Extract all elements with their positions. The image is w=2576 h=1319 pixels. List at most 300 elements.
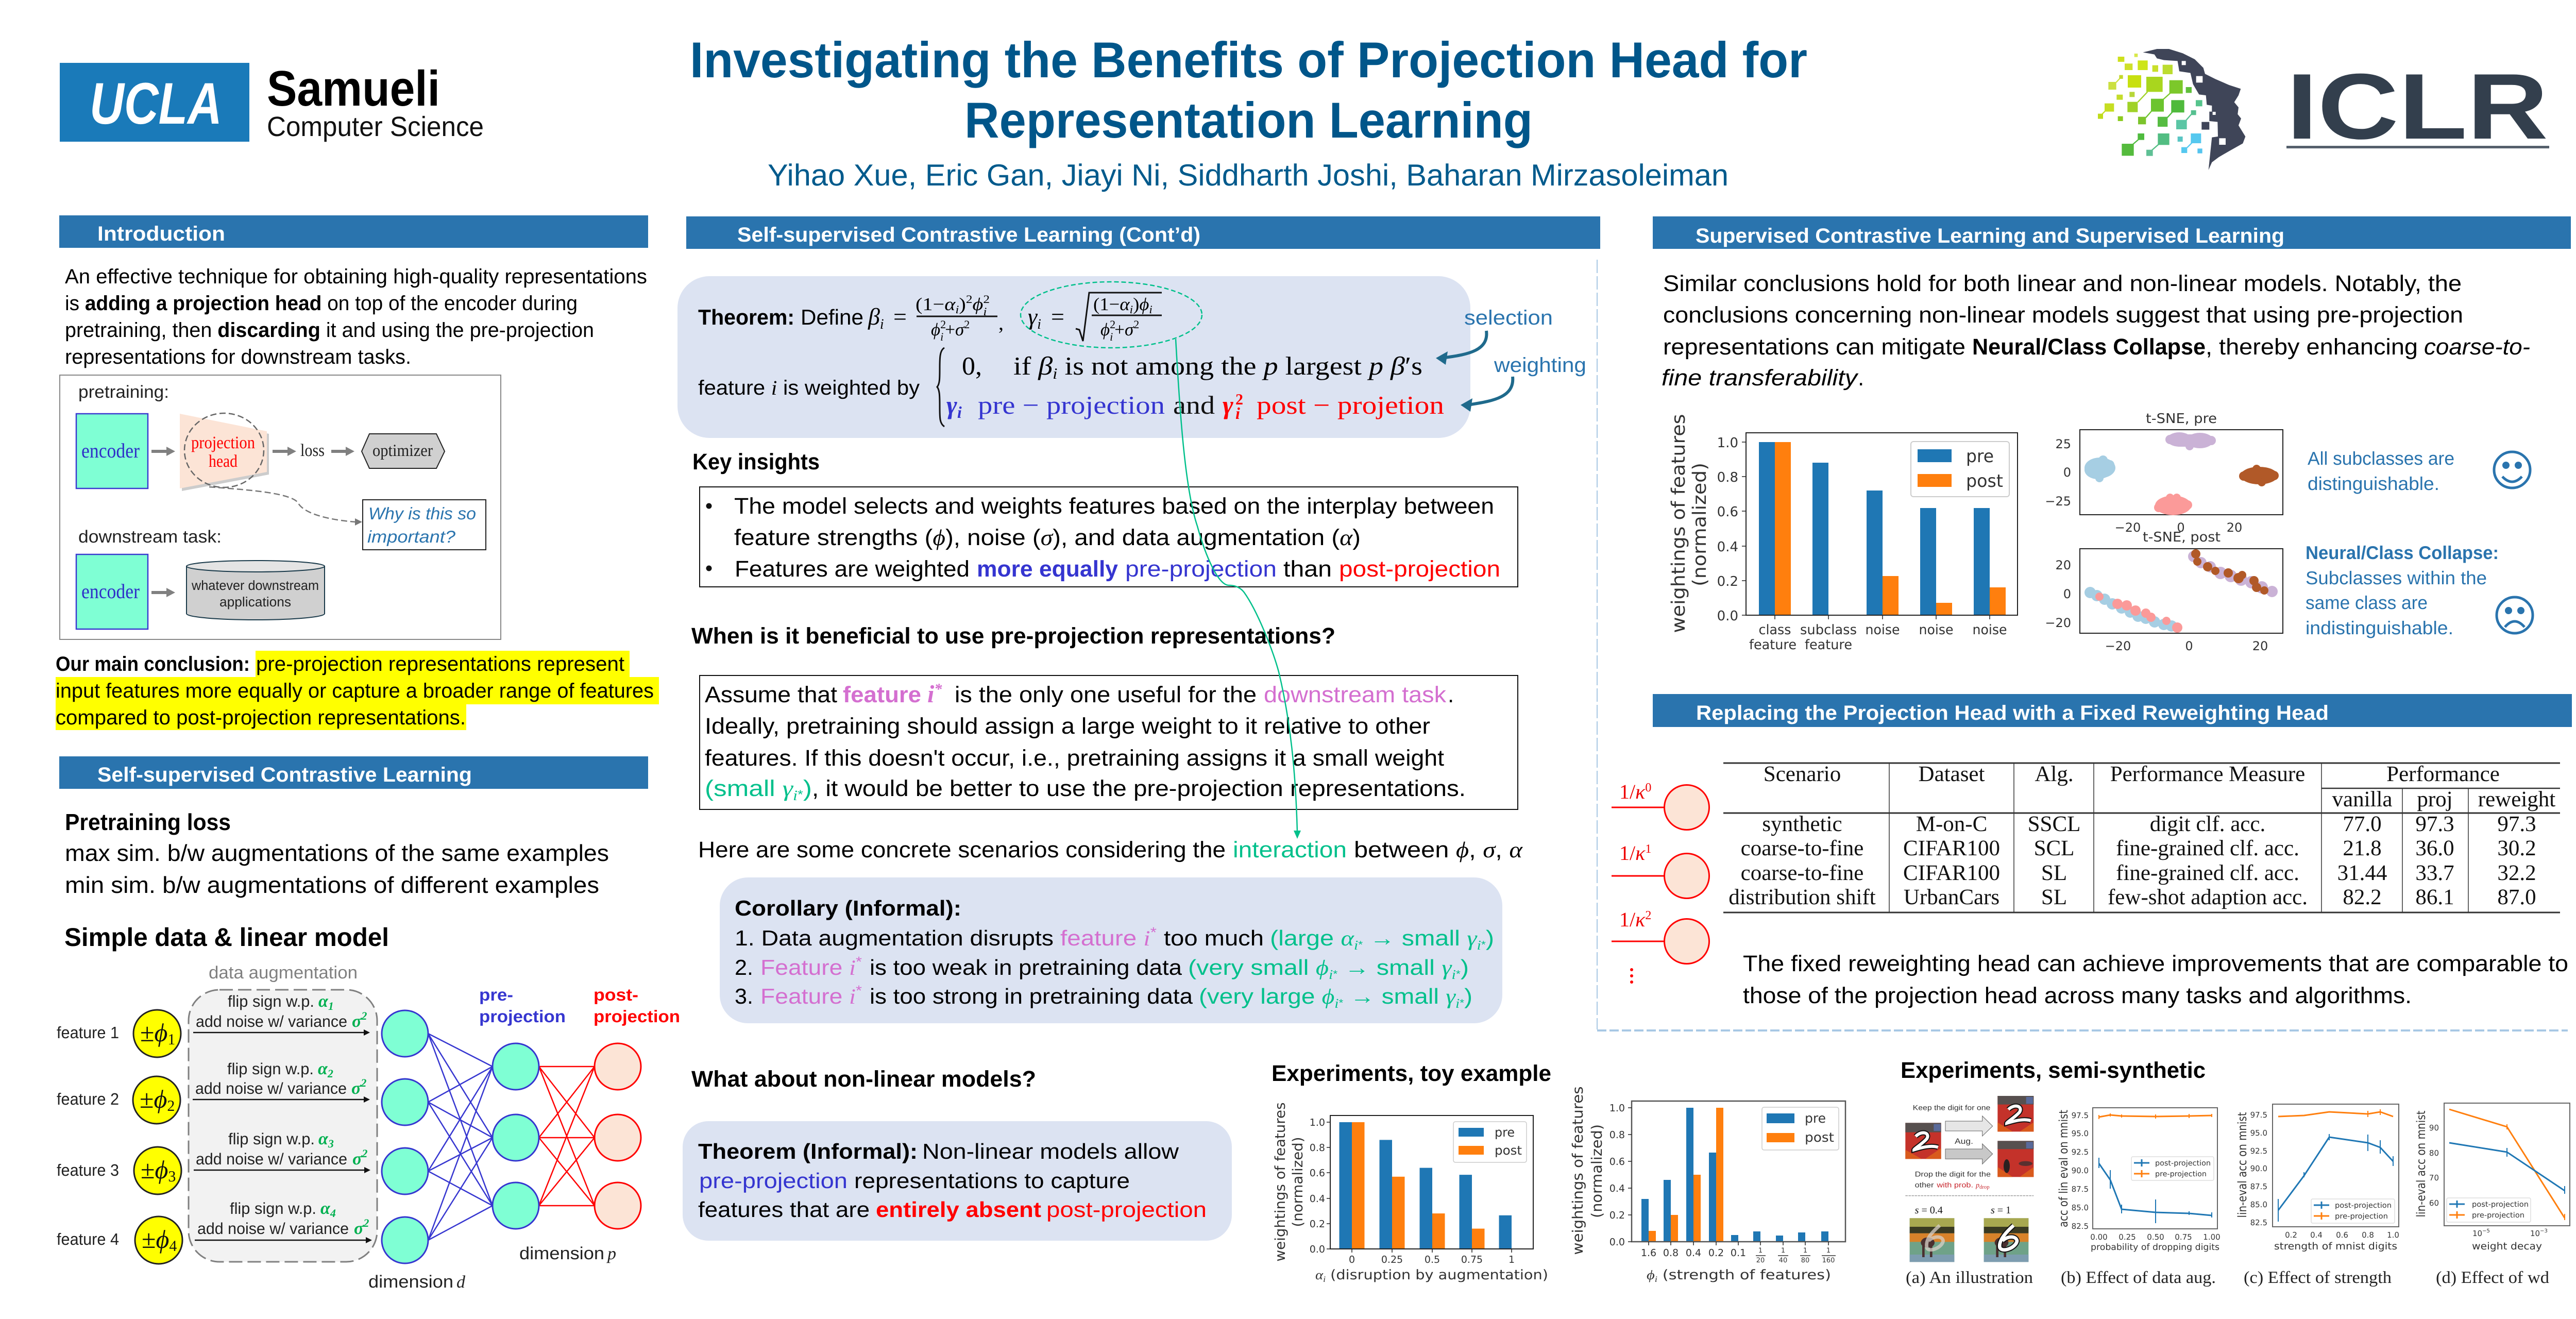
theorem box: + — [1114, 319, 1125, 340]
text box: assumption: . — [1448, 682, 1454, 707]
table: performance: few-shot adaption acc. — [2108, 885, 2308, 909]
line chart: effect of wd: 60 — [2429, 1198, 2439, 1208]
bar chart: strength of features: 0.6 — [1609, 1156, 1625, 1168]
text block: , thereby enhancing — [2206, 334, 2418, 360]
text block: distinguishable: distinguishable. — [2308, 473, 2439, 494]
corollary box: → small — [1363, 926, 1467, 950]
corollary box: i — [1354, 938, 1358, 953]
callout: main conclusion: input features more equally or capture a broader range of features — [56, 680, 654, 702]
text block: distinguishable — [2308, 448, 2454, 494]
table: performance: SL — [2041, 861, 2067, 885]
corollary box: (very small ϕ — [1188, 955, 1327, 980]
table: performance: Alg. — [2035, 762, 2074, 786]
callout: main conclusion: compared to post-projection representations. — [56, 706, 466, 729]
text: illustration labels: other — [1915, 1181, 1934, 1189]
bar chart: weightings of features: 1.0 — [1717, 435, 1738, 451]
highlight ellipse — [1021, 282, 1202, 348]
line chart: effect of wd: lin-eval acc on mnist — [2415, 1111, 2428, 1217]
line chart: effect of strength — [2236, 1104, 2399, 1252]
bar chart: weightings of features: (normalized) — [1689, 463, 1710, 586]
bar chart: strength of features: i — [1655, 1275, 1657, 1284]
diagram: feature network: ±ϕ — [140, 1085, 167, 1113]
legend — [1453, 1122, 1527, 1162]
corollary box: 3. — [735, 984, 753, 1008]
bar chart: strength of features: 1.0 — [1609, 1103, 1625, 1114]
line chart: effect of wd: 80 — [2429, 1148, 2439, 1158]
diagram: reweighting head: 0 — [1645, 781, 1651, 794]
bar chart: weightings of features: feature — [1749, 637, 1797, 653]
table: performance: synthetic — [1762, 812, 1842, 836]
arrow: theorem to interaction — [1176, 339, 1301, 839]
logo: ICLR: ICLR — [2286, 55, 2548, 159]
legend: post — [1805, 1130, 1834, 1145]
table: performance: vanilla — [2332, 787, 2393, 811]
diagram: feature network: 4 — [330, 1207, 336, 1220]
diagram: feature network: 2 — [361, 1147, 367, 1160]
annotation: weighting — [1461, 354, 1586, 412]
table: performance: 86.1 — [2415, 885, 2454, 909]
text: illustration labels: Keep the digit for one — [1913, 1104, 1990, 1111]
bar chart: weightings of features: 0.6 — [1717, 504, 1738, 520]
panel: Introduction — [56, 215, 659, 730]
scatter plot: t-SNE pre: −25 — [2045, 494, 2071, 509]
table: performance: SSCL — [2028, 812, 2080, 836]
diagram: reweighting head: 1 — [1645, 842, 1651, 856]
scatter plot: t-SNE post: t-SNE, post — [2143, 530, 2221, 545]
text box: assumption: * — [934, 681, 942, 698]
annotation: selection: selection — [1464, 307, 1553, 329]
text block: representations can mitigate — [1663, 334, 1965, 360]
text box: key insights: The model selects and weights features based on the interplay between — [734, 494, 1494, 519]
cylinder: applications — [219, 594, 291, 610]
augmentation rows: flip sign w.p. — [228, 1130, 315, 1148]
theorem box: ϕ — [1139, 294, 1149, 314]
text box: key insights: post-projection — [1339, 556, 1500, 582]
corollary box: * — [1456, 969, 1461, 980]
bar chart: augmentation disruption — [1273, 1103, 1548, 1284]
heading: non-linear models: What about non-linear models? — [691, 1067, 1036, 1092]
scatter plot: t-SNE pre — [2045, 411, 2283, 535]
scatter plot: t-SNE pre: −20 — [2115, 520, 2141, 535]
line chart: effect of strength: 0.6 — [2336, 1230, 2348, 1240]
optimizer — [362, 434, 445, 468]
diagram: reweighting head — [1612, 780, 1709, 984]
diagram: feature network: σ — [352, 1012, 361, 1031]
diagram: feature network: ±ϕ — [141, 1155, 168, 1184]
corollary box: feature i — [1060, 926, 1149, 951]
theorem box: is not among the — [1058, 351, 1264, 380]
text block: pretraining loss: min sim. b/w augmentations of different examples — [65, 872, 599, 898]
diagram: feature network: dimension — [519, 1244, 604, 1263]
bar chart: weightings of features: 0.4 — [1717, 539, 1738, 555]
line chart: effect of strength: 1.0 — [2387, 1230, 2399, 1240]
corollary box: (large α — [1270, 926, 1352, 951]
heading: Supervised Contrastive Learning and Supervised Learning — [1696, 225, 2284, 247]
line chart: effect of data aug: 0.25 — [2119, 1232, 2136, 1242]
bar chart: weightings of features: subclass — [1800, 622, 1857, 638]
scatter plot: t-SNE pre: 0 — [2177, 520, 2185, 535]
table: performance: 97.3 — [2497, 812, 2536, 836]
text box: key insights: feature strengths ( ϕ), noise ( σ), and data augmentation ( α) — [734, 525, 1361, 550]
bar chart: strength of features: 0.8 — [1663, 1247, 1679, 1259]
diagram: feature network: 3 — [168, 1168, 176, 1185]
diagram: feature network: α — [318, 992, 328, 1011]
diagram: feature network: σ — [352, 1149, 362, 1169]
bar chart: strength of features: 1 — [1758, 1247, 1762, 1255]
theorem informal box: features that are — [698, 1197, 870, 1222]
authors: Yihao Xue, Eric Gan, Jiayi Ni, Siddharth Joshi, Baharan Mirzasoleiman — [768, 158, 1728, 192]
legend: pre-projection — [2472, 1211, 2524, 1220]
line chart: effect of strength: 95.0 — [2250, 1128, 2267, 1138]
heading — [59, 756, 648, 789]
text box: assumption: feature — [843, 682, 921, 707]
diagram: feature network: pre- — [479, 985, 513, 1004]
line chart: effect of wd: 90 — [2429, 1123, 2439, 1132]
text: illustration labels: Drop the digit for the — [1915, 1170, 1991, 1178]
theorem box: i — [955, 303, 959, 316]
bar chart: strength of features: 0.2 — [1708, 1247, 1724, 1259]
theorem box: i — [940, 330, 943, 343]
augmentation rows: add noise w/ variance — [195, 1079, 347, 1097]
line chart: effect of data aug: acc of lin eval on mnist — [2057, 1110, 2071, 1227]
arrow: keep digit — [1945, 1116, 1993, 1136]
diagram: feature network: 2 — [327, 1067, 333, 1080]
text box: assumption: Ideally, pretraining should assign a large weight to it relative to other — [705, 714, 1430, 739]
corollary box: i — [1334, 996, 1339, 1011]
table: performance — [1723, 762, 2560, 912]
diagram: feature network: post- — [594, 985, 638, 1004]
bar chart: augmentation disruption: (disruption by augmentation) — [1326, 1267, 1548, 1283]
legend: post-projection — [2472, 1200, 2529, 1209]
heading: Self-supervised Contrastive Learning (Cont’d) — [737, 224, 1200, 246]
text block: collapse: same class are — [2306, 592, 2428, 613]
text box: assumption: i — [927, 681, 934, 708]
table: performance: M-on-C — [1916, 812, 1987, 836]
theorem box: i — [1037, 316, 1041, 332]
legend: post-projection — [2335, 1202, 2392, 1210]
bar chart: augmentation disruption: 1.0 — [1310, 1117, 1325, 1128]
table: performance: 36.0 — [2415, 836, 2454, 860]
augmentation rows: flip sign w.p. — [230, 1199, 316, 1217]
line chart: effect of strength: 90.0 — [2250, 1164, 2267, 1173]
diagram: feature network: data augmentation — [209, 963, 358, 983]
legend: pre-projection — [2335, 1212, 2388, 1221]
diagram: feature network: d — [456, 1273, 466, 1292]
augmentation rows: add noise w/ variance — [196, 1150, 347, 1168]
corollary box: is too weak in pretraining data — [870, 955, 1182, 979]
network connections pre-projection — [428, 1034, 493, 1240]
scatter plot: t-SNE post: −20 — [2045, 616, 2071, 630]
table: performance: coarse-to-fine — [1741, 836, 1863, 860]
logo: ICLR — [2098, 49, 2549, 170]
text block: coarse-to- — [2424, 334, 2530, 360]
bar chart: weightings of features — [1668, 414, 2018, 653]
bar chart: augmentation disruption: 0.5 — [1425, 1254, 1440, 1265]
line chart: effect of strength: 0.2 — [2285, 1230, 2297, 1240]
theorem informal box: entirely absent — [876, 1197, 1041, 1222]
bar chart: strength of features: 40 — [1779, 1257, 1787, 1264]
table: performance: UrbanCars — [1904, 885, 1999, 909]
corollary box: ) — [1461, 955, 1469, 979]
theorem box: (1−α — [1093, 294, 1130, 314]
diagram: feature network: 3 — [328, 1137, 334, 1150]
theorem informal box: representations to capture — [854, 1169, 1130, 1193]
theorem box: post − projetion — [1257, 391, 1444, 419]
line chart: effect of strength: 97.5 — [2250, 1110, 2267, 1120]
theorem box: 2 — [1133, 318, 1139, 331]
theorem box: 2 — [1110, 318, 1115, 331]
theorem box: , — [998, 311, 1004, 334]
text block: concrete scenarios: Here are some concrete scenarios considering the — [698, 837, 1226, 863]
diagram: feature network: feature 1 — [57, 1023, 119, 1042]
corollary box: * — [1333, 969, 1338, 980]
theorem box: 0, — [962, 351, 982, 380]
line chart: effect of strength: 0.4 — [2310, 1230, 2323, 1240]
icon: sad face — [2497, 597, 2533, 633]
text block: concrete scenarios — [698, 837, 1523, 863]
text block: introduction paragraph: An effective technique for obtaining high-quality representations — [65, 265, 647, 288]
augmentation rows: flip sign w.p. — [228, 992, 314, 1010]
text box: assumption: Assume that — [705, 682, 837, 707]
illustration: digit augmentation examples: s = 0.4 — [1915, 1204, 1943, 1215]
diagram: feature network: 2 — [167, 1097, 175, 1114]
text box: assumption: , it would be better to use the pre-projection representations. — [812, 776, 1466, 801]
heading: when beneficial: When is it beneficial to use pre-projection representations? — [691, 623, 1335, 649]
diagram: feature network: projection — [479, 1007, 566, 1026]
line chart: effect of strength: 87.5 — [2250, 1182, 2267, 1191]
legend: pre-projection — [2155, 1170, 2207, 1178]
augmentation rows: add noise w/ variance — [197, 1220, 349, 1238]
panel: Self-supervised Contrastive Learning — [57, 756, 680, 1292]
title — [690, 31, 1807, 148]
theorem box: γ — [1028, 303, 1037, 330]
table: performance: 32.2 — [2497, 861, 2536, 885]
panel: Supervised Contrastive Learning and Supervised Learning — [1653, 216, 2571, 653]
corollary box: is too strong in pretraining data — [870, 984, 1193, 1008]
diagram: feature network — [57, 963, 680, 1292]
bar chart: strength of features: (normalized) — [1588, 1124, 1605, 1218]
theorem box: ϕ — [1100, 319, 1110, 340]
encoder box — [76, 414, 148, 488]
theorem box: γ — [946, 391, 957, 419]
corollary box: i — [1329, 967, 1333, 982]
bar chart: strength of features: 80 — [1801, 1257, 1809, 1264]
heading: Replacing the Projection Head with a Fixed Reweighting Head — [1696, 702, 2329, 724]
diagram: pretraining and downstream pipeline — [60, 375, 501, 639]
scatter plot: t-SNE post: 0 — [2185, 639, 2193, 653]
bar chart: augmentation disruption: (normalized) — [1290, 1137, 1306, 1227]
text block — [1662, 271, 2530, 391]
legend — [1911, 442, 2009, 497]
bar chart: augmentation disruption: 0.8 — [1310, 1142, 1325, 1154]
line chart: effect of strength: lin-eval acc on mnist — [2236, 1112, 2249, 1218]
theorem box: p largest p β′s — [1264, 351, 1420, 380]
theorem informal box: post-projection — [1046, 1197, 1207, 1222]
text block: fixed reweighting head conclusion — [1743, 951, 2568, 1008]
diagram: feature network: α — [318, 1129, 328, 1148]
logo: UCLA Samueli: UCLA — [90, 71, 222, 137]
scatter plot: t-SNE post: 20 — [2252, 639, 2268, 653]
text block: Neural/Class Collapse — [1972, 334, 2206, 360]
text box: assumption: features. If this doesn't occur, i.e., pretraining assigns it a small weight — [705, 746, 1444, 771]
legend: pre — [1805, 1111, 1826, 1126]
table: performance: digit clf. acc. — [2150, 812, 2265, 836]
text block: fixed reweighting head conclusion: The fixed reweighting head can achieve improvements that are comparable to — [1743, 951, 2568, 976]
theorem box: i — [957, 403, 962, 421]
bar chart: augmentation disruption: 0.6 — [1310, 1168, 1325, 1179]
table: performance: 21.8 — [2343, 836, 2382, 860]
text block: Similar conclusions hold for both linear and non-linear models. Notably, the — [1663, 271, 2462, 296]
text block: collapse: Neural/Class Collapse: — [2306, 542, 2499, 563]
theorem box: i — [1110, 330, 1113, 343]
corollary box: Feature i — [760, 955, 855, 980]
table: performance: SCL — [2034, 836, 2074, 860]
text block: collapse: Subclasses within the — [2306, 567, 2487, 588]
bar chart: strength of features — [1569, 1086, 1845, 1284]
text block: introduction paragraph: representations for downstream tasks. — [65, 346, 411, 368]
line chart: effect of wd: 70 — [2429, 1173, 2439, 1182]
line chart: effect of wd: 10 — [2530, 1229, 2540, 1238]
theorem box: = — [893, 303, 907, 330]
augmentation rows — [195, 992, 349, 1238]
table: performance: 87.0 — [2497, 885, 2536, 909]
theorem box: i — [1130, 303, 1133, 316]
cylinder: whatever downstream — [191, 578, 319, 593]
bar chart: strength of features: 160 — [1822, 1257, 1835, 1264]
projection head: projection — [191, 433, 255, 452]
table: performance: Performance Measure — [2110, 762, 2305, 786]
corollary box: * — [1481, 939, 1486, 951]
bar chart: strength of features: 20 — [1756, 1257, 1765, 1264]
scatter plot: t-SNE post: 20 — [2055, 558, 2071, 572]
heading — [1653, 216, 2571, 249]
bar chart: weightings of features: weightings of features — [1668, 414, 1689, 633]
text: illustration labels — [1913, 1104, 1991, 1190]
theorem box: ) — [959, 294, 966, 314]
diagram: feature network: ±ϕ — [140, 1018, 167, 1047]
heading: Introduction: Introduction — [97, 223, 225, 245]
text block: conclusions concerning non-linear models suggest that using pre-projection — [1663, 302, 2463, 328]
line chart: effect of data aug: 1.00 — [2203, 1232, 2221, 1242]
bar chart: strength of features: weightings of features — [1569, 1086, 1586, 1255]
theorem box: ϕ — [972, 294, 983, 314]
legend — [2311, 1199, 2395, 1223]
corollary box: Feature i — [760, 984, 855, 1009]
panel: Self-supervised Contrastive Learning (Cont'd) — [677, 216, 1600, 1241]
theorem box: ) — [1133, 294, 1139, 314]
theorem box: (1−α — [916, 294, 955, 314]
line chart: effect of data aug: 97.5 — [2072, 1111, 2089, 1120]
text box: assumption: i — [793, 788, 798, 804]
theorem box: i — [983, 305, 987, 318]
image: car with digit kept — [1997, 1096, 2033, 1131]
table: performance: 31.44 — [2337, 861, 2387, 885]
bar chart: strength of features: 1 — [1803, 1247, 1807, 1255]
bar chart: augmentation disruption: 1 — [1509, 1254, 1515, 1265]
diagram: feature network: σ — [351, 1079, 361, 1098]
theorem box: σ — [955, 319, 965, 340]
title: Investigating the Benefits of Projection Head for — [690, 31, 1807, 88]
theorem box: i — [1149, 303, 1153, 316]
image: weak digit — [1910, 1218, 1954, 1262]
diagram: feature network: 2 — [361, 1009, 367, 1022]
corollary box: i — [1477, 938, 1481, 953]
bar chart: strength of features: 0.4 — [1609, 1183, 1625, 1194]
diagram: feature network: dimension — [368, 1272, 453, 1292]
diagram: reweighting head: 1/κ — [1619, 908, 1645, 931]
logo: UCLA Samueli — [60, 60, 484, 142]
bar chart: weightings of features: 0.8 — [1717, 470, 1738, 485]
text box: assumption: (small γ — [705, 776, 791, 801]
text block: . — [1858, 365, 1864, 391]
augmentation rows: flip sign w.p. — [227, 1060, 314, 1078]
scatter plot: t-SNE post — [2045, 530, 2283, 653]
corollary box: * — [856, 954, 862, 970]
text box: assumption — [700, 675, 1518, 809]
heading: key insights: Key insights — [692, 449, 820, 475]
annotation: selection — [1436, 307, 1553, 365]
logo: UCLA Samueli: Computer Science — [267, 111, 484, 142]
theorem box: ϕ — [931, 319, 940, 340]
line chart: effect of data aug — [2057, 1108, 2221, 1253]
text block: collapse: indistinguishable. — [2306, 617, 2453, 638]
corollary box: * — [856, 983, 862, 999]
bar chart: strength of features: 0.1 — [1731, 1247, 1746, 1259]
captions: semi-synthetic subfigures — [1906, 1269, 2550, 1287]
theorem box: feature i is weighted by — [698, 376, 920, 399]
diagram: feature network: 2 — [363, 1216, 369, 1229]
line chart: effect of strength: strength of mnist digits — [2274, 1241, 2397, 1252]
image: car with digit dropped — [1997, 1141, 2033, 1177]
text block: pretraining loss — [65, 809, 609, 898]
theorem box: + — [945, 319, 955, 340]
illustration: digit augmentation examples — [1905, 1096, 2033, 1262]
theorem box: and — [1173, 391, 1215, 419]
bar chart: strength of features: 1.6 — [1641, 1247, 1656, 1259]
line chart: effect of data aug: 92.5 — [2072, 1147, 2089, 1157]
line chart: effect of data aug: 85.0 — [2072, 1203, 2089, 1212]
heading: Introduction — [59, 215, 648, 248]
text box: key insights: more equally — [977, 556, 1118, 582]
text block: concrete scenarios: interaction — [1233, 837, 1347, 863]
bar chart: strength of features: 0.8 — [1609, 1129, 1625, 1141]
captions: semi-synthetic subfigures: (c) Effect of strength — [2244, 1269, 2392, 1287]
image: car with digit — [1905, 1123, 1941, 1159]
line chart: effect of strength: 92.5 — [2250, 1146, 2267, 1156]
scatter plot: t-SNE pre: 0 — [2063, 465, 2071, 480]
diagram: feature network: 2 — [360, 1076, 366, 1089]
theorem box: if β — [1013, 351, 1051, 380]
theorem box: γ — [1223, 391, 1233, 419]
corollary box: * — [1358, 939, 1363, 951]
text: illustration labels: Aug. — [1955, 1137, 1973, 1145]
table: performance: distribution shift — [1728, 885, 1876, 909]
bar chart: augmentation disruption: 0.4 — [1310, 1193, 1325, 1205]
theorem box: 2 — [966, 293, 972, 306]
legend: post — [1495, 1143, 1522, 1158]
bar chart: strength of features: 1 — [1781, 1247, 1785, 1255]
line chart: effect of wd: −5 — [2482, 1228, 2490, 1234]
corollary box — [720, 877, 1502, 1023]
bar chart: strength of features: 0.2 — [1609, 1210, 1625, 1221]
text box: assumption: is the only one useful for the — [955, 682, 1257, 707]
theorem box: Define — [801, 305, 863, 329]
table: performance: 82.2 — [2343, 885, 2382, 909]
corollary box: * — [1150, 924, 1157, 940]
bar chart: augmentation disruption: α — [1315, 1267, 1324, 1282]
theorem box: σ — [1125, 319, 1134, 340]
text box: key insights: Features are weighted — [735, 556, 970, 582]
